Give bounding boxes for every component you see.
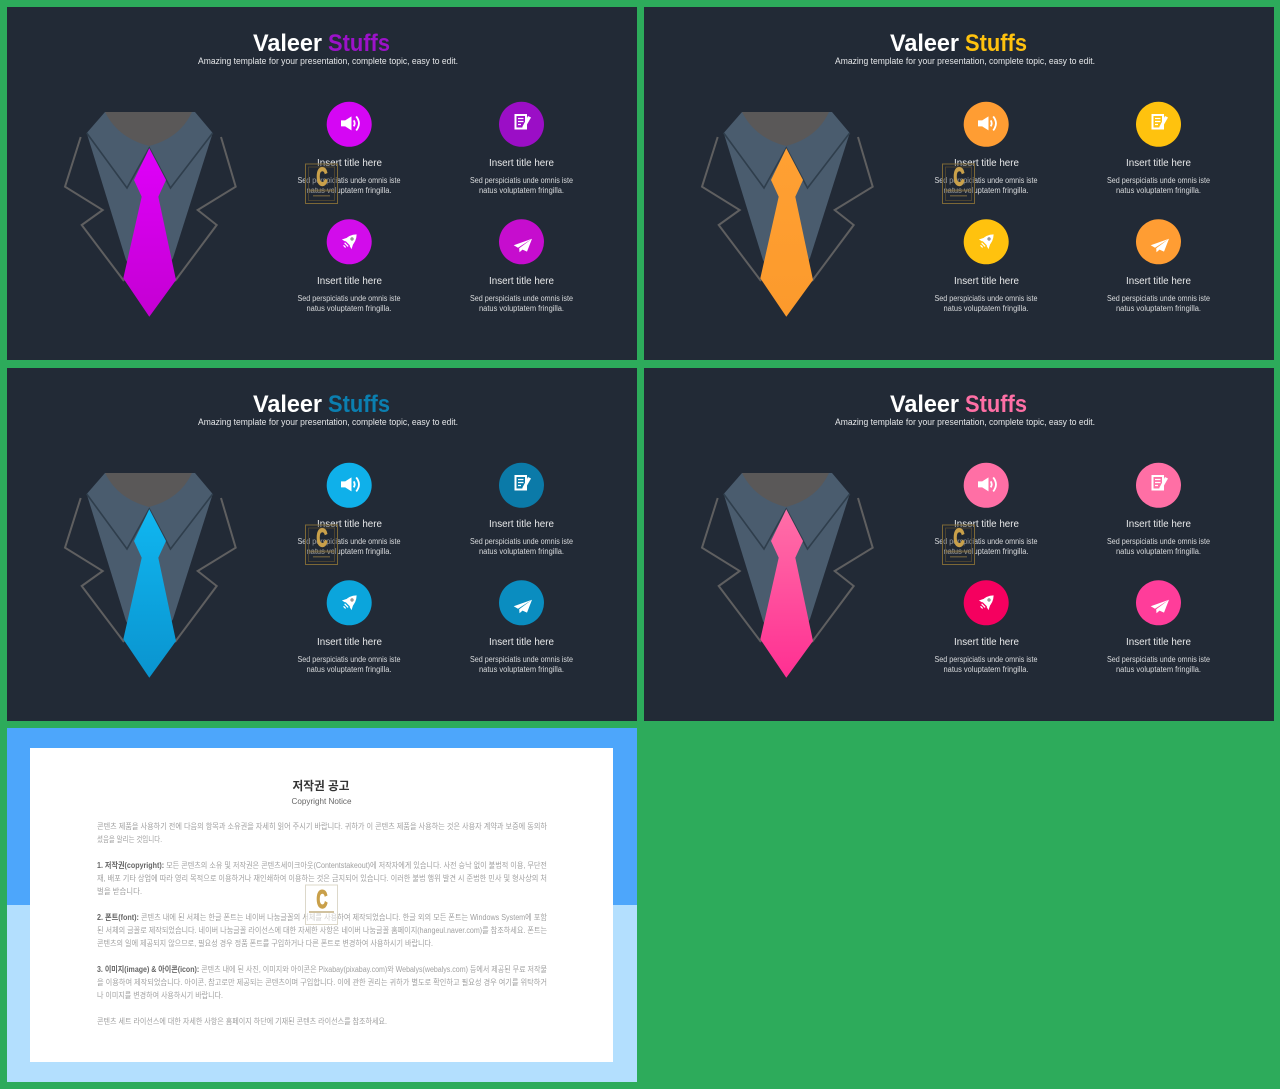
item: sound: Insert title here [317,157,382,169]
item: sound [298,463,401,556]
suit and tie illustration [702,473,873,678]
watermark badge [942,164,974,204]
item: note [470,102,573,195]
item: rocket: Sed perspiciatis unde omnis iste [934,294,1038,303]
section 2: 2. 폰트(font): 콘텐츠 내에 된 서체는 한글 폰트는 네이버 나눔글꼴의 서체를 사용하여 제작되었습니다. 한글 외의 모든 폰트는 Windows System에 포함 [97,912,548,922]
item: note: Insert title here [489,157,554,169]
subtitle: Amazing template for your presentation, complete topic, easy to edit. [198,56,458,67]
item: sound: Sed perspiciatis unde omnis iste [934,537,1038,546]
suit and tie illustration [702,112,873,317]
item: rocket: Sed perspiciatis unde omnis iste [298,655,401,664]
section 2 [97,912,548,948]
intro text [97,821,548,844]
item: rocket: Insert title here [317,275,382,287]
item: note [470,463,573,556]
title [890,391,1027,418]
item: plane: Insert title here [489,275,554,287]
section 1: 1. 저작권(copyright): 모든 콘텐츠의 소유 및 저작권은 콘텐츠세이크아웃(Contentstakeout)에 저작자에게 있습니다. 사전 승낙 없이 불법적 이용, 무단전 [97,860,547,870]
subtitle: Amazing template for your presentation, complete topic, easy to edit. [198,417,458,428]
item: plane: natus voluptatem fringilla. [1116,665,1201,674]
item: note: natus voluptatem fringilla. [1116,547,1201,556]
item: sound [934,102,1038,195]
item: sound: Sed perspiciatis unde omnis iste [934,176,1038,185]
watermark badge [306,164,338,204]
item: rocket: Insert title here [317,636,382,648]
title: Valeer [890,391,959,418]
heading: copyright: 저작권 공고 [292,778,350,793]
item: plane: Sed perspiciatis unde omnis iste [470,655,573,664]
item: note: Sed perspiciatis unde omnis iste [1107,176,1210,185]
title: Stuffs [328,391,390,418]
panel: orange slide [644,7,1274,360]
item: plane: Insert title here [1126,636,1191,648]
section 3 [97,964,547,1000]
item: rocket: natus voluptatem fringilla. [306,304,392,313]
section 3: 나 이미지를 변경하여 사용하시기 바랍니다. [97,990,223,1000]
title: Stuffs [965,30,1027,57]
title [253,391,390,418]
item: note: Sed perspiciatis unde omnis iste [1107,537,1210,546]
item: sound: natus voluptatem fringilla. [944,186,1028,195]
item: note: natus voluptatem fringilla. [479,186,564,195]
suit and tie illustration [65,112,236,317]
item: note: Insert title here [1126,157,1191,169]
title: Stuffs [965,391,1027,418]
section 1: 재, 배포 기타 상업에 따라 영리 목적으로 이용하거나 재인쇄하여 이용하는 것은 금지되어 있습니다. 이러한 불법 행위 발견 시 준법한 민사 및 형사상의 처 [97,873,547,883]
item: plane [1107,219,1210,313]
watermark badge [306,524,338,564]
title: Stuffs [328,30,390,57]
item: plane: Sed perspiciatis unde omnis iste [470,294,573,303]
item: note: Insert title here [1126,518,1191,530]
item: note: Sed perspiciatis unde omnis iste [470,176,573,185]
item: sound [298,102,401,195]
intro text: 셨음을 알리는 것입니다. [97,834,162,844]
item: sound: natus voluptatem fringilla. [306,547,392,556]
item: plane: natus voluptatem fringilla. [479,304,564,313]
title: Valeer [253,30,322,57]
item: rocket [298,219,401,313]
item: note: Sed perspiciatis unde omnis iste [470,537,573,546]
item: sound [934,463,1038,556]
item: sound: Insert title here [317,518,382,530]
item: note: natus voluptatem fringilla. [1116,186,1201,195]
item: rocket: Insert title here [954,636,1019,648]
section 1 [97,860,547,896]
watermark badge [306,885,338,924]
intro text: 콘텐츠 제품을 사용하기 전에 다음의 항목과 소유권을 자세히 읽어 주시기 바랍니다. 귀하가 이 콘텐츠 제품을 사용하는 것은 사용자 계약과 보증에 동의하 [97,821,548,831]
item: rocket [298,580,401,674]
item: plane: natus voluptatem fringilla. [1116,304,1201,313]
item: rocket: natus voluptatem fringilla. [944,665,1028,674]
item: plane [470,219,573,313]
section 2: 콘텐츠의 일에 제공되지 않으므로, 필요성 경우 정품 폰트를 구입하거나 다른 폰트로 변경하여 사용하시기 바랍니다. [97,938,433,948]
item: note [1107,463,1210,556]
item: sound: Sed perspiciatis unde omnis iste [298,176,401,185]
subheading: Copyright Notice [292,796,352,806]
item: plane: natus voluptatem fringilla. [479,665,564,674]
item: rocket: Sed perspiciatis unde omnis iste [934,655,1038,664]
panel: copyright notice [7,728,637,1082]
item: sound: Insert title here [954,518,1019,530]
watermark badge [942,524,974,564]
item: rocket: Insert title here [954,275,1019,287]
item: rocket [934,219,1038,313]
panel: blue slide [7,368,637,721]
title: Valeer [890,30,959,57]
panel: pink slide [644,368,1274,721]
item: plane: Insert title here [1126,275,1191,287]
item: sound: natus voluptatem fringilla. [944,547,1028,556]
item: plane: Sed perspiciatis unde omnis iste [1107,294,1210,303]
closing note: 콘텐츠 세트 라이선스에 대한 자세한 사항은 홈페이지 하단에 기재된 콘텐츠 라이선스를 참조하세요. [97,1016,387,1026]
watermark badge: C [316,886,328,914]
item: rocket: Sed perspiciatis unde omnis iste [298,294,401,303]
item: note: natus voluptatem fringilla. [479,547,564,556]
item: rocket: natus voluptatem fringilla. [306,665,392,674]
item: rocket [934,580,1038,674]
title [253,30,390,57]
item: sound: natus voluptatem fringilla. [306,186,392,195]
item: plane: Insert title here [489,636,554,648]
section 3: 3. 이미지(image) & 아이콘(icon): 콘텐츠 내에 된 사진, 이미지와 아이콘은 Pixabay(pixabay.com)와 Webalys(webalys.com) 등에서 제공된 무료 저작물 [97,964,547,974]
panel: magenta slide [7,7,637,360]
subtitle: Amazing template for your presentation, complete topic, easy to edit. [835,417,1095,428]
subtitle: Amazing template for your presentation, complete topic, easy to edit. [835,56,1095,67]
item: plane [470,580,573,674]
suit and tie illustration [65,473,236,678]
title [890,30,1027,57]
section 1: 벌을 받습니다. [97,886,142,896]
section 2: 된 서체의 글꼴로 제작되었습니다. 네이버 나눔글꼴 라이선스에 대한 자세한 사항은 네이버 나눔글꼴 홈페이지(hangeul.naver.com)를 참조하세요. 폰트는 [97,925,547,935]
section 3: 을 이용하여 제작되었습니다. 아이콘, 참고로만 제공되는 콘텐츠이며 구입합니다. 이에 관한 권리는 귀하가 별도로 확인하고 필요성 경우 여기를 위탁하거 [97,977,547,987]
item: sound: Insert title here [954,157,1019,169]
item: sound: Sed perspiciatis unde omnis iste [298,537,401,546]
title: Valeer [253,391,322,418]
item: plane: Sed perspiciatis unde omnis iste [1107,655,1210,664]
item: note: Insert title here [489,518,554,530]
item: plane [1107,580,1210,674]
item: rocket: natus voluptatem fringilla. [944,304,1028,313]
item: note [1107,102,1210,195]
